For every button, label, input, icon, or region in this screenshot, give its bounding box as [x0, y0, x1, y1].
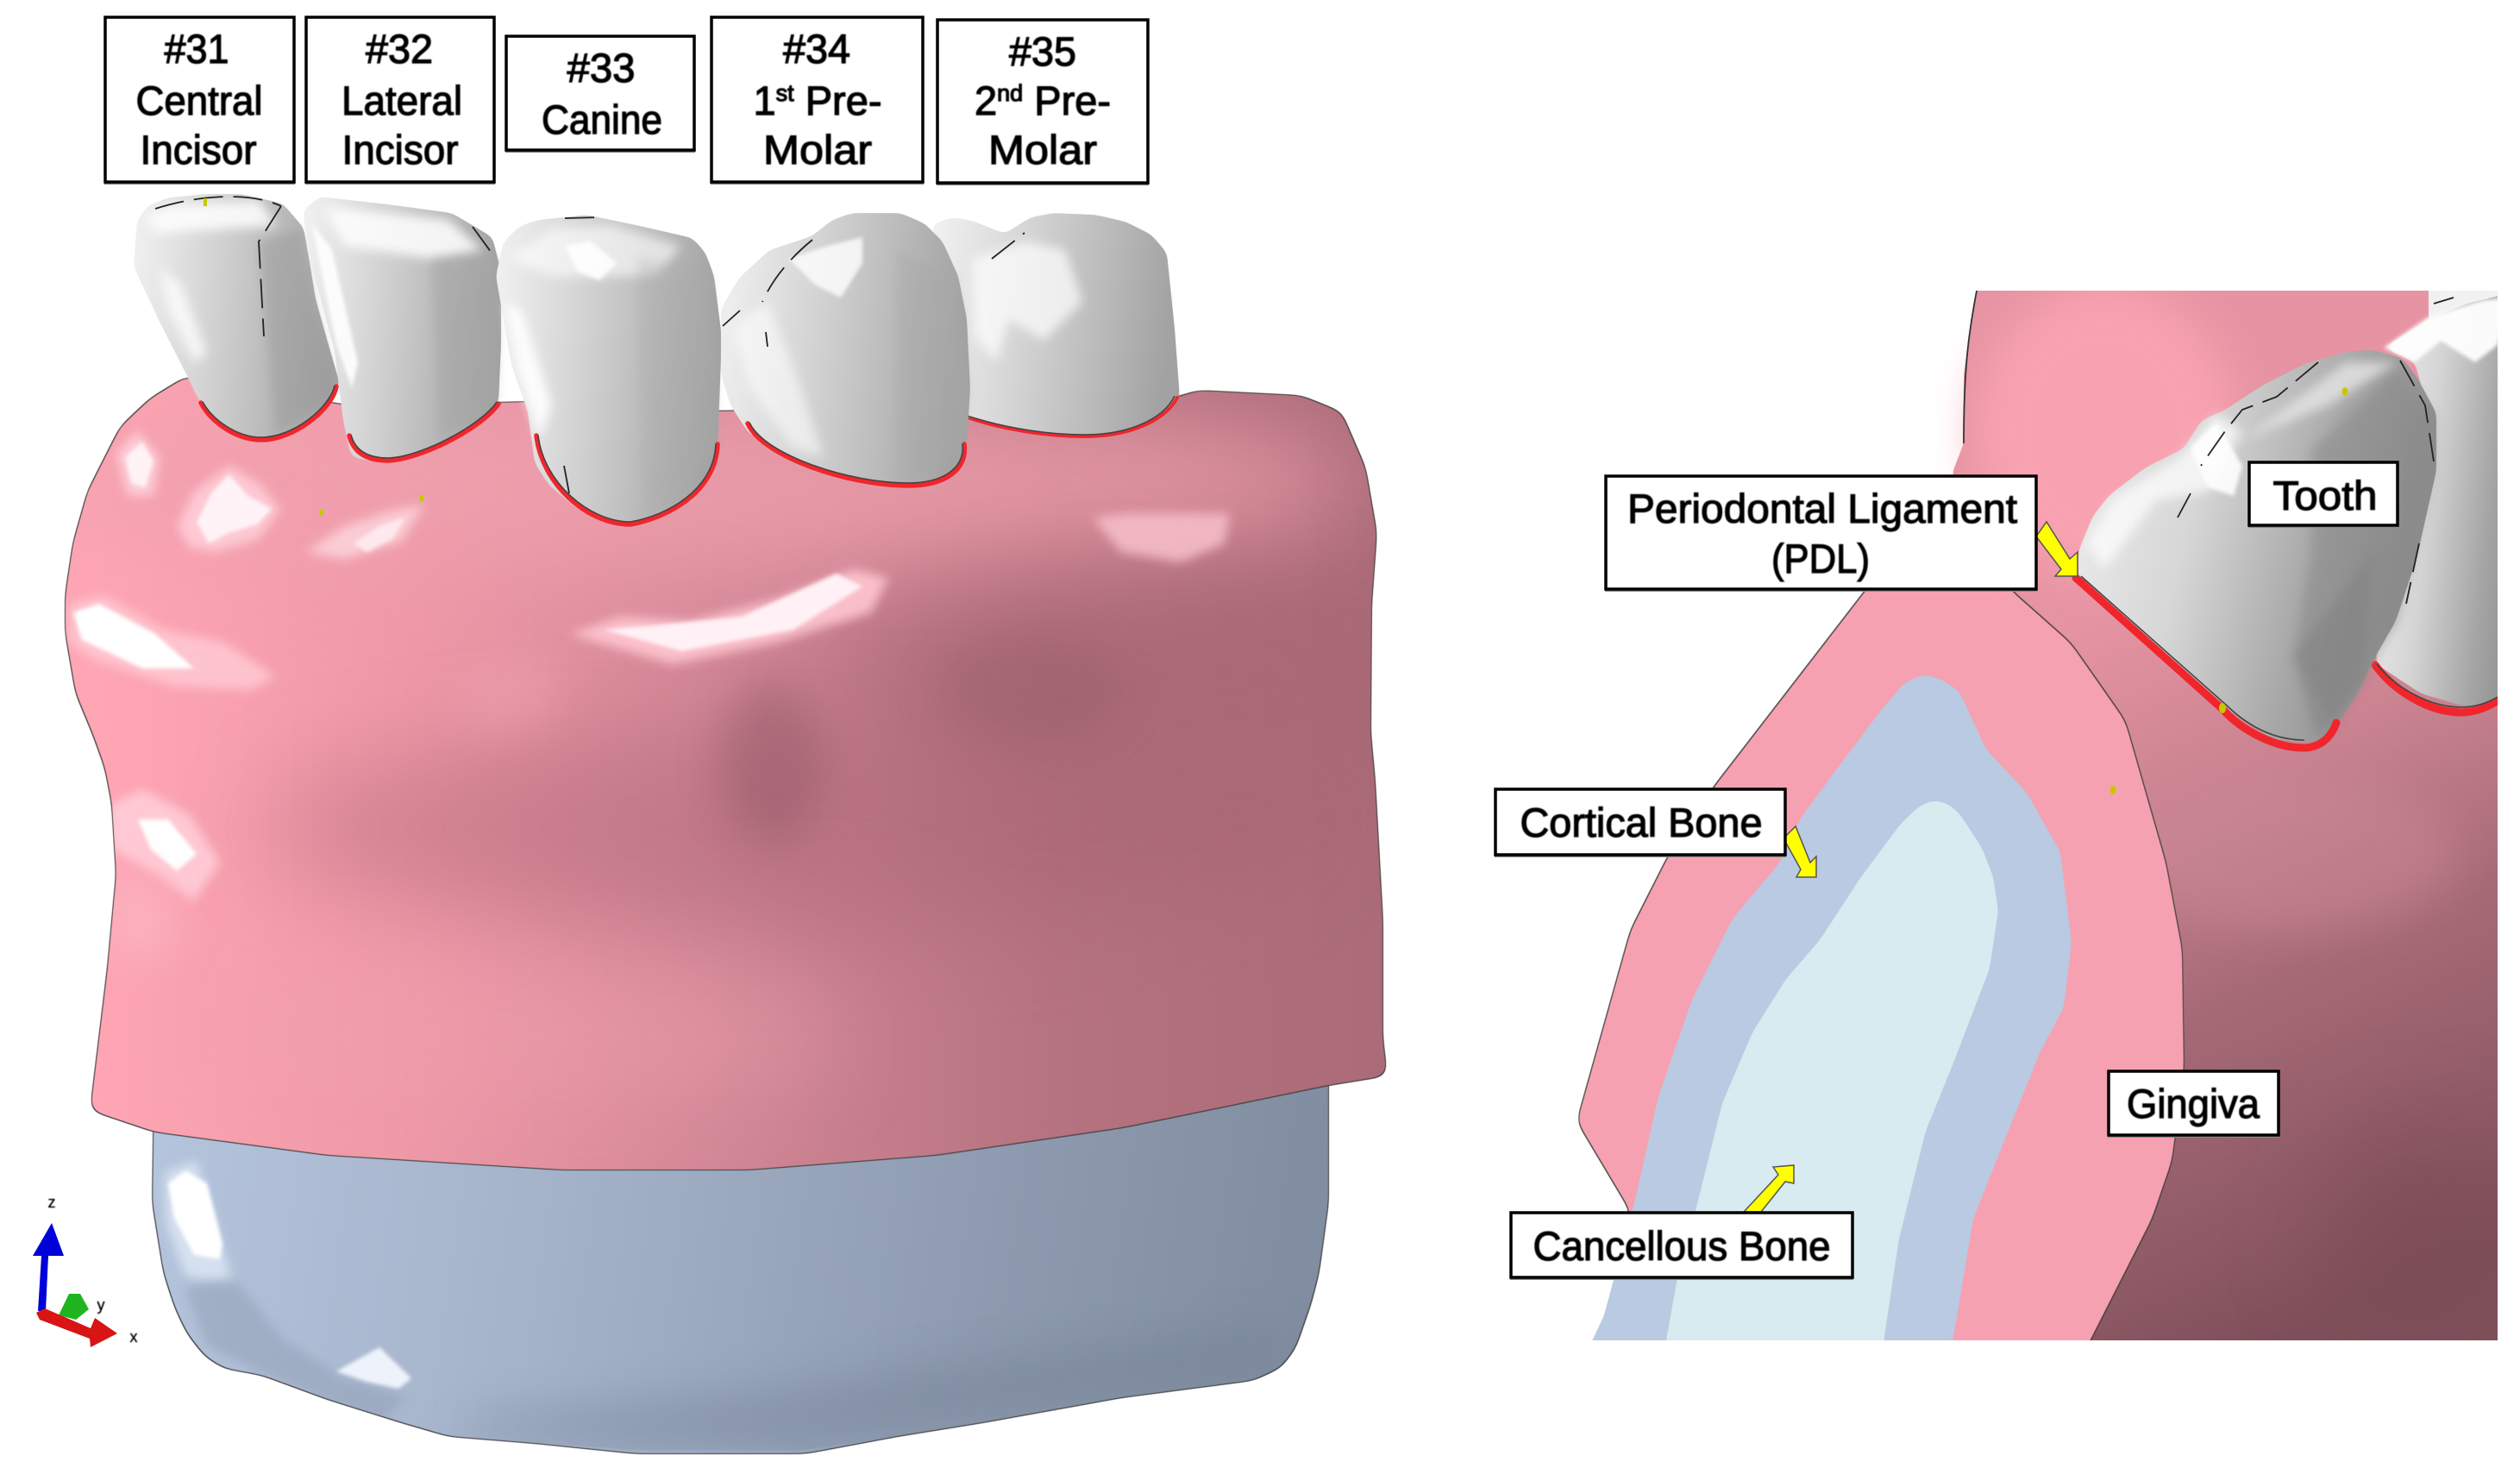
icon: coordinate axes triad: z: [48, 1194, 55, 1211]
label: Gingiva: Gingiva: [2127, 1081, 2260, 1126]
icon: coordinate axes triad: [33, 1194, 138, 1347]
icon: coordinate axes triad: y: [97, 1296, 105, 1314]
highlight: left facets: [116, 431, 160, 496]
label: Gingiva: [2108, 1071, 2279, 1138]
label: #34 1st Pre-Molar: [711, 17, 924, 185]
label: #33 Canine: [505, 36, 695, 153]
label: #34 1st Pre-Molar: Pre-: [794, 78, 882, 123]
label: Cancellous Bone: [1510, 1213, 1853, 1280]
adjacent teeth: [2372, 291, 2498, 716]
label: #32 Lateral Incisor: [305, 17, 495, 185]
label: Periodontal Ligament (PDL): (PDL): [1771, 536, 1870, 581]
tooth #35: [932, 213, 1180, 438]
label: Tooth: Tooth: [2273, 473, 2377, 518]
label: #34 1st Pre-Molar: st: [776, 80, 794, 106]
alveolar bone block: [153, 1035, 1328, 1453]
label: #35 2nd Pre-Molar: 2: [975, 78, 997, 123]
label: #35 2nd Pre-Molar: Pre-: [1023, 78, 1111, 123]
cortical bone section: [1592, 675, 2072, 1340]
tooth #33: [496, 215, 722, 524]
label: #33 Canine: Canine: [542, 97, 662, 142]
right panel: cross-section detail: [1494, 290, 2498, 1340]
label: #31 Central Incisor: Central: [136, 78, 262, 123]
label: #34 1st Pre-Molar: #34: [783, 26, 850, 72]
label: Periodontal Ligament (PDL): [1605, 476, 2037, 592]
label: Cortical Bone: [1495, 789, 1786, 857]
gingiva shading: [66, 377, 1376, 1068]
cancellous bone section: [1666, 801, 1997, 1340]
label: #32 Lateral Incisor: Lateral: [342, 78, 462, 123]
upper gingiva outer edge: [1964, 291, 1977, 443]
label: #33 Canine: #33: [567, 45, 635, 91]
marker dots: [2109, 387, 2348, 794]
gingiva section cut: [1578, 592, 2185, 1340]
label: #31 Central Incisor: [104, 17, 295, 185]
label: #32 Lateral Incisor: Incisor: [342, 127, 459, 173]
tooth #31: [134, 194, 340, 442]
label: #32 Lateral Incisor: #32: [366, 26, 433, 72]
label: #34 1st Pre-Molar: Molar: [763, 127, 872, 173]
label: Cortical Bone: Cortical Bone: [1520, 800, 1763, 845]
label: #35 2nd Pre-Molar: [937, 20, 1149, 185]
tooth with PDL line: [2076, 350, 2436, 748]
arrow: cortical bone pointer: [1783, 826, 1816, 877]
bone shading and highlights: [164, 1160, 1294, 1450]
label: #31 Central Incisor: Incisor: [140, 127, 257, 173]
label: #35 2nd Pre-Molar: #35: [1009, 28, 1076, 74]
marker dots: [204, 198, 423, 516]
left panel: 3D mandible segment model: [0, 17, 1406, 1453]
gingiva outer surface: [1950, 291, 2498, 1340]
label: #34 1st Pre-Molar: 1: [753, 78, 776, 123]
tooth #32: [303, 197, 501, 463]
tooth #34: [721, 213, 970, 487]
arrow: periodontal ligament pointer: [2036, 522, 2078, 576]
label: Cancellous Bone: Cancellous Bone: [1533, 1223, 1830, 1269]
icon: coordinate axes triad: x: [129, 1328, 138, 1346]
gingiva body: [66, 377, 1387, 1170]
label: #35 2nd Pre-Molar: Molar: [988, 127, 1097, 173]
label: Periodontal Ligament (PDL): Periodontal Ligament: [1627, 486, 2017, 531]
label: #35 2nd Pre-Molar: nd: [997, 80, 1023, 106]
label: #31 Central Incisor: #31: [164, 26, 229, 72]
arrow: cancellous bone pointer: [1744, 1165, 1794, 1212]
label: Tooth: [2248, 462, 2398, 528]
